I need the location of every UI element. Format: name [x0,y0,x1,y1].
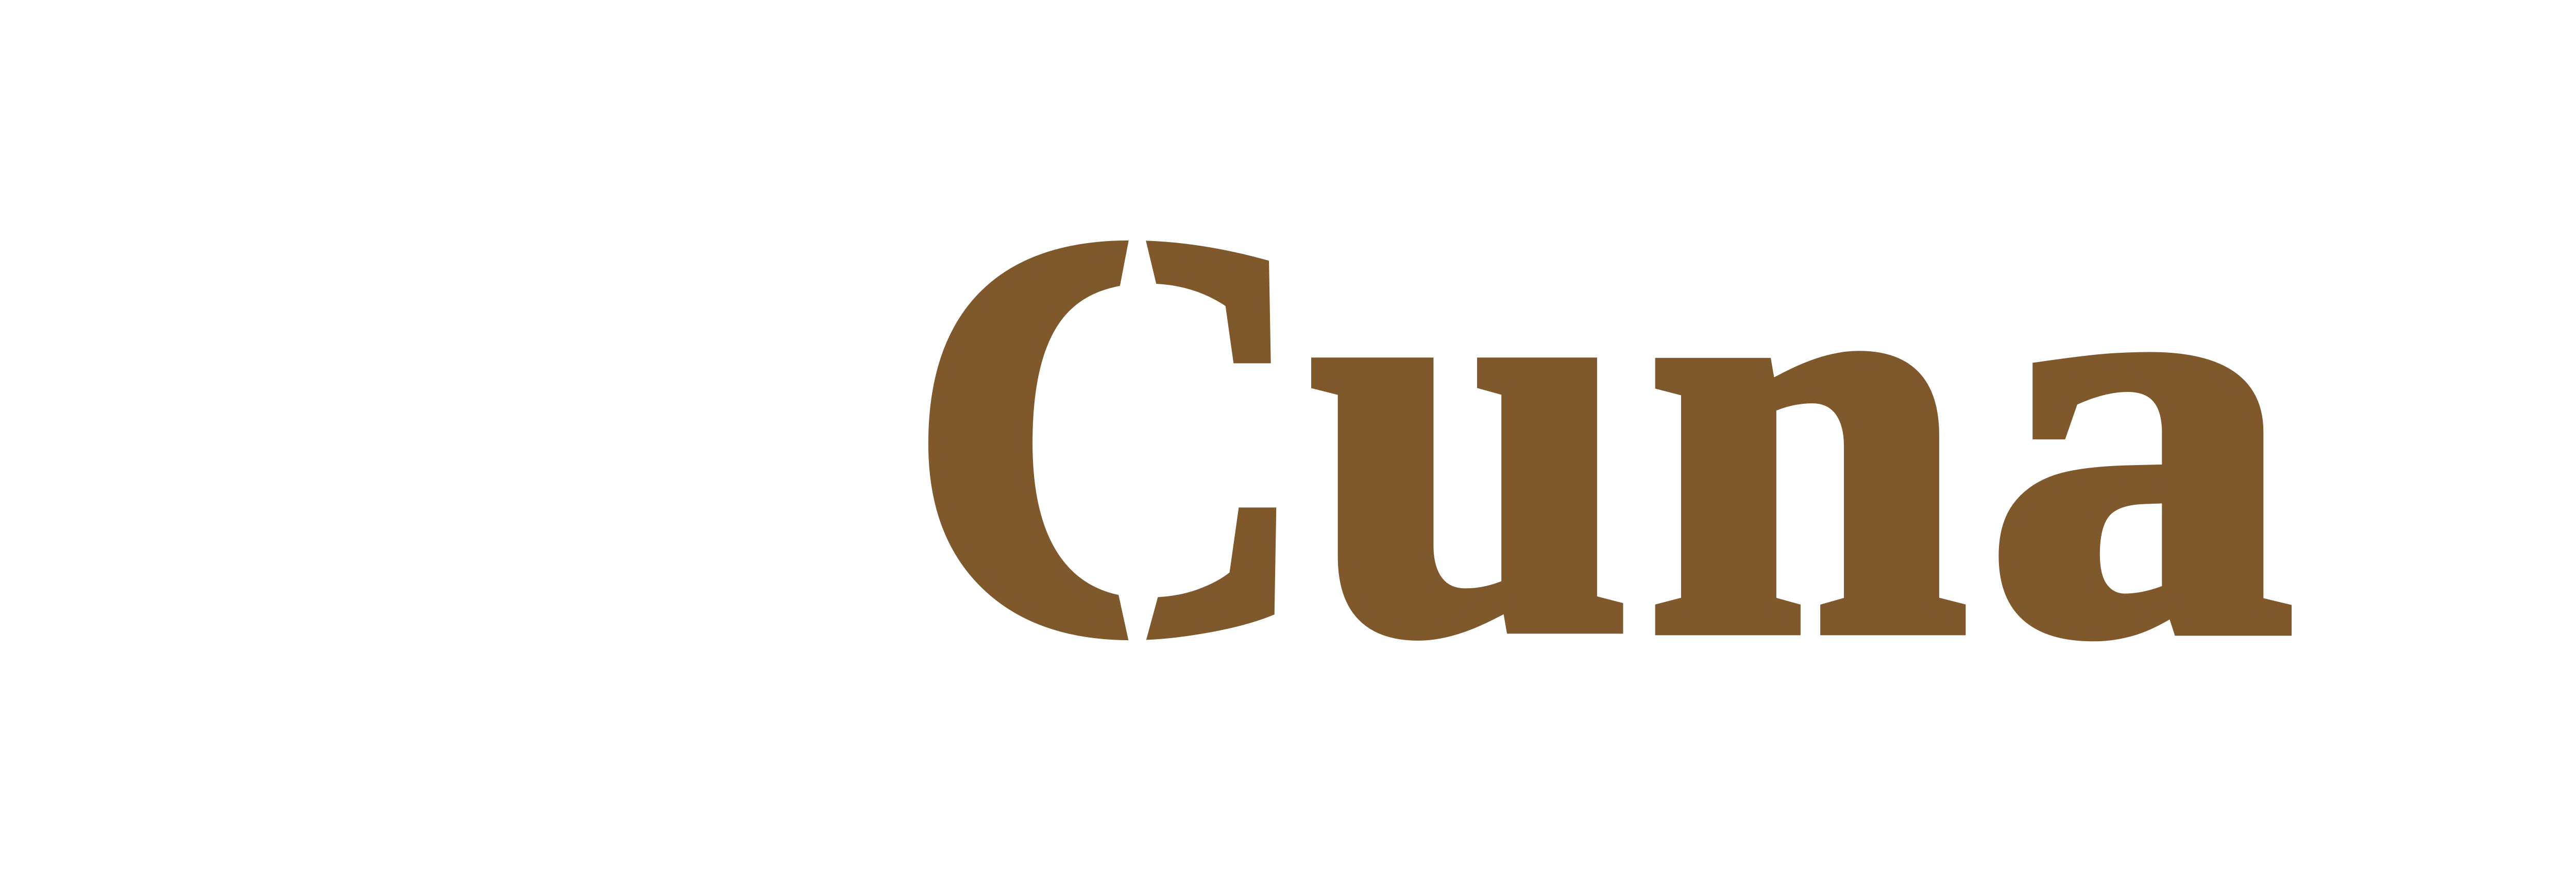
letter C: C [908,116,1312,752]
letter u: u [1310,117,1632,750]
letter a: a [1986,116,2294,753]
logo wordmark: Cuna [908,116,2294,753]
letter n: n [1647,116,1968,752]
